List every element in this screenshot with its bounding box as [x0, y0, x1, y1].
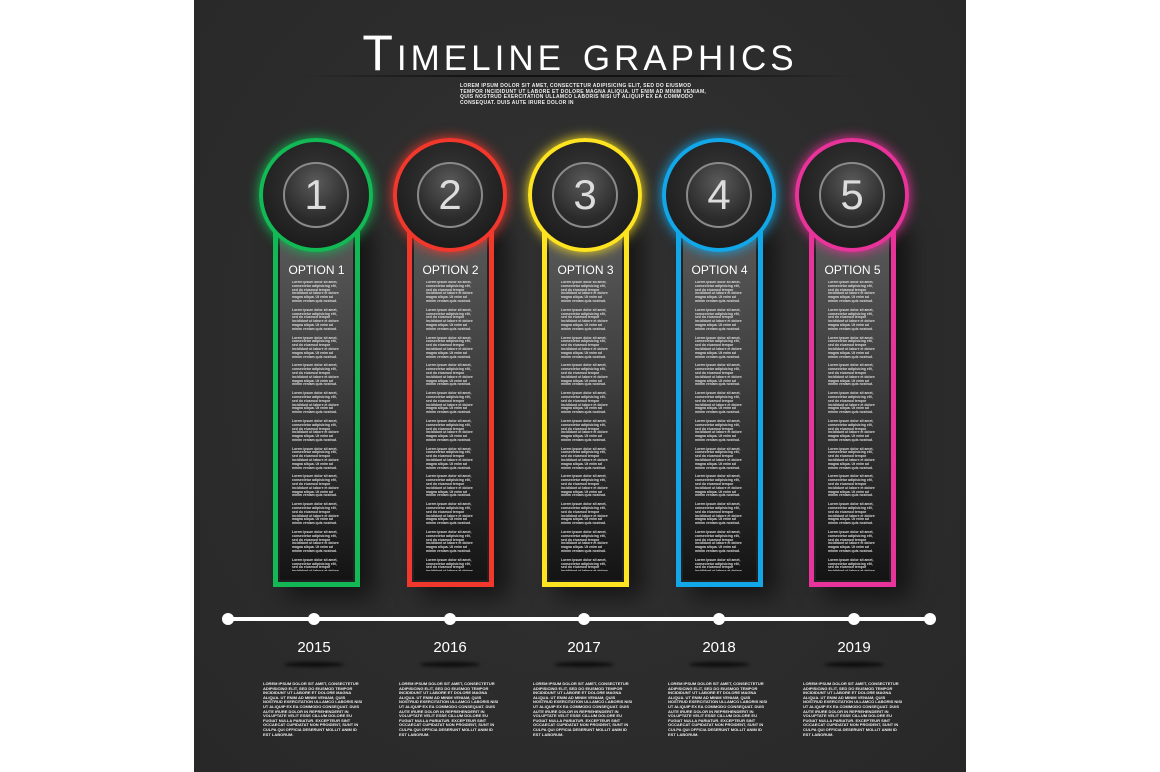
column 4: Lorem ipsum dolor sit amet, consectetur adipisicing elit, sed do eiusmod tempor incididunt ut labore et dolore magna aliqua. Ut enim ad minim veniam quis nostrud. [695, 474, 742, 497]
column 1: 1 [304, 171, 328, 218]
column 4 [652, 128, 785, 602]
text: 2016 [433, 639, 467, 656]
column 5: 5 [840, 171, 864, 218]
column 1: Lorem ipsum dolor sit amet, consectetur adipisicing elit, sed do eiusmod tempor incididunt ut labore et dolore magna aliqua. Ut enim ad minim veniam quis nostrud. [292, 308, 339, 331]
column 1: Lorem ipsum dolor sit amet, consectetur adipisicing elit, sed do eiusmod tempor incididunt ut labore et dolore magna aliqua. Ut enim ad minim veniam quis nostrud. [292, 419, 339, 442]
column 4: 4 [707, 171, 731, 218]
column 1: Lorem ipsum dolor sit amet, consectetur adipisicing elit, sed do eiusmod tempor incididunt ut labore et dolore magna aliqua. Ut enim ad minim veniam quis nostrud. [292, 530, 339, 553]
column 5: Lorem ipsum dolor sit amet, consectetur adipisicing elit, sed do eiusmod tempor incididunt ut labore et dolore magna aliqua. Ut enim ad minim veniam quis nostrud. [828, 336, 875, 359]
column 3: 3 [573, 171, 597, 218]
column 4: Lorem ipsum dolor sit amet, consectetur adipisicing elit, sed do eiusmod tempor incididunt ut labore et dolore magna aliqua. Ut enim ad minim veniam quis nostrud. [695, 447, 742, 470]
column 1: Lorem ipsum dolor sit amet, consectetur adipisicing elit, sed do eiusmod tempor incididunt ut labore et dolore magna aliqua. Ut enim ad minim veniam quis nostrud. [292, 391, 339, 414]
column 4: Lorem ipsum dolor sit amet, consectetur adipisicing elit, sed do eiusmod tempor incididunt ut labore et dolore magna aliqua. Ut enim ad minim veniam quis nostrud. [695, 308, 742, 331]
column 3: Lorem ipsum dolor sit amet, consectetur adipisicing elit, sed do eiusmod tempor incididunt ut labore et dolore magna aliqua. Ut enim ad minim veniam quis nostrud. [561, 363, 608, 386]
column 2: Lorem ipsum dolor sit amet, consectetur adipisicing elit, sed do eiusmod tempor incididunt ut labore et dolore magna aliqua. Ut enim ad minim veniam quis nostrud. [426, 391, 473, 414]
text: 2019 [837, 639, 871, 656]
background panel [194, 0, 966, 772]
column 5: Lorem ipsum dolor sit amet, consectetur adipisicing elit, sed do eiusmod tempor incididunt ut labore et dolore magna aliqua. Ut enim ad minim veniam quis nostrud. [828, 447, 875, 470]
descriptions: LOREM IPSUM DOLOR SIT AMET, CONSECTETUR ADIPISICING ELIT, SED DO EIUSMOD TEMPOR INCIDIDUNT UT LABORE ET DOLORE MAGNA ALIQUA. UT ENIM AD MINIM VENIAM, QUIS NOSTRUD EXERCITATION ULLAMCO LABORIS NISI UT ALIQUIP EX EA COMMODO CONSEQUAT. DUIS AUTE IRURE DOLOR IN REPREHENDERIT IN VOLUPTATE VELIT ESSE CILLUM DOLORE EU FUGIAT NULLA PARIATUR. EXCEPTEUR SINT OCCAECAT CUPIDATAT NON PROIDENT, SUNT IN CULPA QUI OFFICIA DESERUNT MOLLIT ANIM ID EST LABORUM. [263, 681, 362, 737]
text: LOREM IPSUM DOLOR SIT AMET, CONSECTETUR ADIPISICING ELIT, SED DO EIUSMOD TEMPOR INCIDIDUNT UT LABORE ET DOLORE MAGNA ALIQUA. UT ENIM AD MINIM VENIAM, QUIS NOSTRUD EXERCITATION ULLAMCO LABORIS NISI UT ALIQUIP EX EA COMMODO CONSEQUAT. DUIS AUTE IRURE DOLOR IN REPREHENDERIT IN VOLUPTATE VELIT ESSE CILLUM DOLORE EU FUGIAT NULLA PARIATUR. EXCEPTEUR SINT OCCAECAT CUPIDATAT NON PROIDENT, SUNT IN CULPA QUI OFFICIA DESERUNT MOLLIT ANIM ID EST LABORUM. [803, 681, 902, 737]
column 4: Lorem ipsum dolor sit amet, consectetur adipisicing elit, sed do eiusmod tempor incididunt ut labore et dolore magna aliqua. Ut enim ad minim veniam quis nostrud. [695, 336, 742, 359]
text: LOREM IPSUM DOLOR SIT AMET, CONSECTETUR ADIPISICING ELIT, SED DO EIUSMOD TEMPOR INCIDIDUNT UT LABORE ET DOLORE MAGNA ALIQUA. UT ENIM AD MINIM VENIAM, QUIS NOSTRUD EXERCITATION ULLAMCO LABORIS NISI UT ALIQUIP EX EA COMMODO CONSEQUAT. DUIS AUTE IRURE DOLOR IN REPREHENDERIT IN VOLUPTATE VELIT ESSE CILLUM DOLORE EU FUGIAT NULLA PARIATUR. EXCEPTEUR SINT OCCAECAT CUPIDATAT NON PROIDENT, SUNT IN CULPA QUI OFFICIA DESERUNT MOLLIT ANIM ID EST LABORUM. [668, 681, 767, 737]
text: 2017 [567, 639, 601, 656]
column 4: Lorem ipsum dolor sit amet, consectetur adipisicing elit, sed do eiusmod tempor incididunt ut labore et dolore magna aliqua. Ut enim ad minim veniam quis nostrud. [695, 391, 742, 414]
column 2: Lorem ipsum dolor sit amet, consectetur adipisicing elit, sed do eiusmod tempor incididunt ut labore et dolore magna aliqua. Ut enim ad minim veniam quis nostrud. [426, 447, 473, 470]
column 1: Lorem ipsum dolor sit amet, consectetur adipisicing elit, sed do eiusmod tempor incididunt ut labore et dolore magna aliqua. Ut enim ad minim veniam quis nostrud. [292, 363, 339, 386]
column 4: OPTION 4 [691, 263, 748, 277]
column 2: Lorem ipsum dolor sit amet, consectetur adipisicing elit, sed do eiusmod tempor incididunt ut labore et dolore magna aliqua. Ut enim ad minim veniam quis nostrud. [426, 363, 473, 386]
column 4: Lorem ipsum dolor sit amet, consectetur adipisicing elit, sed do eiusmod tempor incididunt ut labore et dolore magna aliqua. Ut enim ad minim veniam quis nostrud. [695, 530, 742, 553]
column 1 [250, 130, 382, 602]
column 3: Lorem ipsum dolor sit amet, consectetur adipisicing elit, sed do eiusmod tempor incididunt ut labore et dolore magna aliqua. Ut enim ad minim veniam quis nostrud. [561, 391, 608, 414]
column 5: Lorem ipsum dolor sit amet, consectetur adipisicing elit, sed do eiusmod tempor incididunt ut labore et dolore magna aliqua. Ut enim ad minim veniam quis nostrud. [828, 419, 875, 442]
column 3: Lorem ipsum dolor sit amet, consectetur adipisicing elit, sed do eiusmod tempor incididunt ut labore et dolore magna aliqua. Ut enim ad minim veniam quis nostrud. [561, 308, 608, 331]
column 2: Lorem ipsum dolor sit amet, consectetur adipisicing elit, sed do eiusmod tempor incididunt ut labore et dolore magna aliqua. Ut enim ad minim veniam quis nostrud. [426, 336, 473, 359]
column 3: Lorem ipsum dolor sit amet, consectetur adipisicing elit, sed do eiusmod tempor incididunt ut labore et dolore magna aliqua. Ut enim ad minim veniam quis nostrud. [561, 530, 608, 553]
column 2 [384, 128, 516, 602]
column 5: Lorem ipsum dolor sit amet, consectetur adipisicing elit, sed do eiusmod tempor incididunt ut labore et dolore magna aliqua. Ut enim ad minim veniam quis nostrud. [828, 363, 875, 386]
column 5: Lorem ipsum dolor sit amet, consectetur adipisicing elit, sed do eiusmod tempor incididunt ut labore et dolore magna aliqua. Ut enim ad minim veniam quis nostrud. [828, 308, 875, 331]
column 5: Lorem ipsum dolor sit amet, consectetur adipisicing elit, sed do eiusmod tempor incididunt ut labore et dolore magna aliqua. Ut enim ad minim veniam quis nostrud. [828, 502, 875, 525]
column 2: 2 [438, 171, 462, 218]
column 1: Lorem ipsum dolor sit amet, consectetur adipisicing elit, sed do eiusmod tempor incididunt ut labore et dolore magna aliqua. Ut enim ad minim veniam quis nostrud. [292, 447, 339, 470]
text: LOREM IPSUM DOLOR SIT AMET, CONSECTETUR ADIPISICING ELIT, SED DO EIUSMOD TEMPOR INCIDIDUNT UT LABORE ET DOLORE MAGNA ALIQUA. UT ENIM AD MINIM VENIAM, QUIS NOSTRUD EXERCITATION ULLAMCO LABORIS NISI UT ALIQUIP EX EA COMMODO CONSEQUAT. DUIS AUTE IRURE DOLOR IN REPREHENDERIT IN VOLUPTATE VELIT ESSE CILLUM DOLORE EU FUGIAT NULLA PARIATUR. EXCEPTEUR SINT OCCAECAT CUPIDATAT NON PROIDENT, SUNT IN CULPA QUI OFFICIA DESERUNT MOLLIT ANIM ID EST LABORUM. [399, 681, 498, 737]
column 4: Lorem ipsum dolor sit amet, consectetur adipisicing elit, sed do eiusmod tempor incididunt ut labore et dolore magna aliqua. Ut enim ad minim veniam quis nostrud. [695, 419, 742, 442]
column 2: Lorem ipsum dolor sit amet, consectetur adipisicing elit, sed do eiusmod tempor incididunt ut labore et dolore magna aliqua. Ut enim ad minim veniam quis nostrud. [426, 474, 473, 497]
timeline line [228, 617, 930, 621]
column 2: OPTION 2 [422, 263, 478, 277]
column 3: OPTION 3 [557, 263, 614, 277]
column 5 [786, 128, 918, 602]
column 4: Lorem ipsum dolor sit amet, consectetur adipisicing elit, sed do eiusmod tempor incididunt ut labore et dolore magna aliqua. Ut enim ad minim veniam quis nostrud. [695, 363, 742, 386]
column 2: Lorem ipsum dolor sit amet, consectetur adipisicing elit, sed do eiusmod tempor incididunt ut labore et dolore magna aliqua. Ut enim ad minim veniam quis nostrud. [426, 502, 473, 525]
text: LOREM IPSUM DOLOR SIT AMET, CONSECTETUR ADIPISICING ELIT, SED DO EIUSMOD TEMPOR INCIDIDUNT UT LABORE ET DOLORE MAGNA ALIQUA. UT ENIM AD MINIM VENIAM, QUIS NOSTRUD EXERCITATION ULLAMCO LABORIS NISI UT ALIQUIP EX EA COMMODO CONSEQUAT. DUIS AUTE IRURE DOLOR IN REPREHENDERIT IN VOLUPTATE VELIT ESSE CILLUM DOLORE EU FUGIAT NULLA PARIATUR. EXCEPTEUR SINT OCCAECAT CUPIDATAT NON PROIDENT, SUNT IN CULPA QUI OFFICIA DESERUNT MOLLIT ANIM ID EST LABORUM. [533, 681, 632, 737]
column 5: Lorem ipsum dolor sit amet, consectetur adipisicing elit, sed do eiusmod tempor incididunt ut labore et dolore magna aliqua. Ut enim ad minim veniam quis nostrud. [828, 474, 875, 497]
column 1: Lorem ipsum dolor sit amet, consectetur adipisicing elit, sed do eiusmod tempor incididunt ut labore et dolore magna aliqua. Ut enim ad minim veniam quis nostrud. [292, 336, 339, 359]
column 2: Lorem ipsum dolor sit amet, consectetur adipisicing elit, sed do eiusmod tempor incididunt ut labore et dolore magna aliqua. Ut enim ad minim veniam quis nostrud. [426, 419, 473, 442]
column 5: OPTION 5 [824, 263, 880, 277]
column 5: Lorem ipsum dolor sit amet, consectetur adipisicing elit, sed do eiusmod tempor incididunt ut labore et dolore magna aliqua. Ut enim ad minim veniam quis nostrud. [828, 530, 875, 553]
column 1: OPTION 1 [288, 263, 344, 277]
years: 2015 [297, 639, 331, 656]
text: 2018 [702, 639, 736, 656]
column 3: Lorem ipsum dolor sit amet, consectetur adipisicing elit, sed do eiusmod tempor incididunt ut labore et dolore magna aliqua. Ut enim ad minim veniam quis nostrud. [561, 419, 608, 442]
column 3: Lorem ipsum dolor sit amet, consectetur adipisicing elit, sed do eiusmod tempor incididunt ut labore et dolore magna aliqua. Ut enim ad minim veniam quis nostrud. [561, 336, 608, 359]
subtitle text: LOREM IPSUM DOLOR SIT AMET, CONSECTETUR ADIPISICING ELIT, SED DO EIUSMOD TEMPOR INCIDIDUNT UT LABORE ET DOLORE MAGNA ALIQUA. UT ENIM AD MINIM VENIAM, QUIS NOSTRUD EXERCITATION ULLAMCO LABORIS NISI UT ALIQUIP EX EA COMMODO CONSEQUAT. DUIS AUTE IRURE DOLOR IN [460, 83, 706, 106]
column 3 [518, 128, 652, 602]
column 3: Lorem ipsum dolor sit amet, consectetur adipisicing elit, sed do eiusmod tempor incididunt ut labore et dolore magna aliqua. Ut enim ad minim veniam quis nostrud. [561, 474, 608, 497]
title: Timeline graphics [362, 25, 798, 81]
column 1: Lorem ipsum dolor sit amet, consectetur adipisicing elit, sed do eiusmod tempor incididunt ut labore et dolore magna aliqua. Ut enim ad minim veniam quis nostrud. [292, 474, 339, 497]
column 5: Lorem ipsum dolor sit amet, consectetur adipisicing elit, sed do eiusmod tempor incididunt ut labore et dolore magna aliqua. Ut enim ad minim veniam quis nostrud. [828, 391, 875, 414]
column 4: Lorem ipsum dolor sit amet, consectetur adipisicing elit, sed do eiusmod tempor incididunt ut labore et dolore magna aliqua. Ut enim ad minim veniam quis nostrud. [695, 502, 742, 525]
column 1: Lorem ipsum dolor sit amet, consectetur adipisicing elit, sed do eiusmod tempor incididunt ut labore et dolore magna aliqua. Ut enim ad minim veniam quis nostrud. [292, 502, 339, 525]
column 3: Lorem ipsum dolor sit amet, consectetur adipisicing elit, sed do eiusmod tempor incididunt ut labore et dolore magna aliqua. Ut enim ad minim veniam quis nostrud. [561, 447, 608, 470]
column 2: Lorem ipsum dolor sit amet, consectetur adipisicing elit, sed do eiusmod tempor incididunt ut labore et dolore magna aliqua. Ut enim ad minim veniam quis nostrud. [426, 530, 473, 553]
column 2: Lorem ipsum dolor sit amet, consectetur adipisicing elit, sed do eiusmod tempor incididunt ut labore et dolore magna aliqua. Ut enim ad minim veniam quis nostrud. [426, 308, 473, 331]
column 3: Lorem ipsum dolor sit amet, consectetur adipisicing elit, sed do eiusmod tempor incididunt ut labore et dolore magna aliqua. Ut enim ad minim veniam quis nostrud. [561, 502, 608, 525]
